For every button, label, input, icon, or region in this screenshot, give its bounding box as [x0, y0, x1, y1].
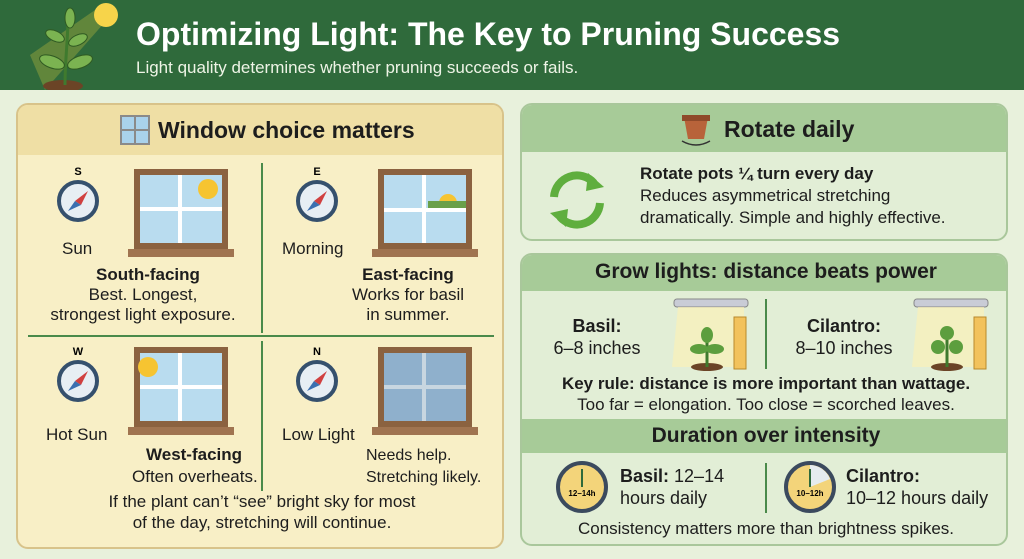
basil hours: Basil: 12–14 [620, 466, 724, 486]
quadrant: east: Morning [282, 239, 343, 258]
heading: grow lights [522, 255, 1010, 291]
icon: compass W [57, 346, 99, 402]
heading: window choice matters [18, 105, 506, 155]
icon: dim window [372, 347, 478, 435]
footer note [108, 492, 416, 532]
basil distance: Basil: [572, 316, 622, 336]
quadrant: west: West-facing [146, 445, 242, 464]
text: rotate instructions: dramatically. Simple and highly effective. [640, 208, 946, 227]
key rule: Key rule: distance is more important than wattage. [562, 374, 970, 393]
icon: compass S [57, 166, 99, 222]
text: rotate instructions: Rotate pots ¼ turn every day [640, 164, 873, 183]
key rule: Too far = elongation. Too close = scorched leaves. [577, 395, 955, 414]
icon: compass W: W [73, 346, 84, 358]
footer note: If the plant can’t “see” bright sky for most [108, 492, 416, 511]
footer note: of the day, stretching will continue. [133, 513, 391, 532]
cilantro hours [846, 466, 988, 508]
key rule [562, 374, 970, 414]
quadrant: north: Low Light [282, 425, 355, 444]
quadrant: south: Best. Longest, [89, 285, 197, 304]
basil hours: hours daily [620, 488, 707, 508]
quadrant: west: Often overheats. [132, 467, 258, 486]
quadrant: east [282, 166, 478, 324]
icon: compass N [296, 346, 338, 402]
heading: window choice matters: Window choice matters [158, 117, 415, 143]
subtitle: Light quality determines whether pruning succeeds or fails. [136, 58, 578, 77]
icon: clock 10-12h: 10–12h [796, 489, 824, 498]
icon: clock 12-14h: 12–14h [568, 489, 596, 498]
icon: basil under light [672, 298, 748, 371]
consistency note: Consistency matters more than brightness spikes. [578, 519, 954, 538]
header banner [0, 0, 1024, 90]
icon: compass N: N [313, 346, 321, 358]
heading: duration [522, 419, 1010, 453]
icon: clock 12-14h [556, 461, 608, 513]
heading: duration: Duration over intensity [652, 424, 880, 447]
icon: rotation arrows [550, 171, 604, 229]
quadrant: south: strongest light exposure. [50, 305, 236, 324]
icon: plant with sun [30, 3, 118, 90]
heading: grow lights: Grow lights: distance beats power [595, 260, 937, 283]
text: rotate instructions [640, 164, 946, 227]
quadrant: east: East-facing [362, 265, 454, 284]
quadrant: south [50, 166, 236, 324]
cilantro distance [795, 316, 893, 358]
icon: window with sun [128, 169, 234, 257]
cilantro hours: 10–12 hours daily [846, 488, 988, 508]
heading: rotate daily [522, 105, 1010, 152]
cilantro distance: Cilantro: [807, 316, 881, 336]
panel: grow lights & duration [520, 253, 1008, 546]
panel: rotate daily [520, 103, 1008, 241]
title: Optimizing Light: The Key to Pruning Success [136, 16, 840, 52]
quadrant: north [282, 346, 481, 486]
icon: compass E: E [313, 166, 321, 178]
icon: window with sunrise [372, 169, 478, 257]
basil hours [620, 466, 724, 508]
quadrant: south: South-facing [96, 265, 200, 284]
heading: rotate daily: Rotate daily [724, 116, 854, 142]
quadrant: west [46, 346, 258, 486]
quadrant: west: Hot Sun [46, 425, 107, 444]
quadrant: east: Works for basil [352, 285, 464, 304]
icon: window with sun [128, 347, 234, 435]
text: rotate instructions: Reduces asymmetrical stretching [640, 186, 890, 205]
icon: clock 10-12h [784, 461, 836, 513]
icon: cilantro under light [912, 298, 988, 371]
cilantro distance: 8–10 inches [795, 338, 893, 358]
basil distance [553, 316, 641, 358]
quadrant: north: Stretching likely. [366, 469, 481, 486]
quadrant: south: Sun [62, 239, 92, 258]
quadrant: north: Needs help. [366, 447, 451, 464]
basil distance: 6–8 inches [553, 338, 641, 358]
icon: compass S: S [74, 166, 82, 178]
icon: compass E [296, 166, 338, 222]
quadrant: east: in summer. [366, 305, 450, 324]
cilantro hours: Cilantro: [846, 466, 920, 486]
panel: window choice [16, 103, 504, 549]
